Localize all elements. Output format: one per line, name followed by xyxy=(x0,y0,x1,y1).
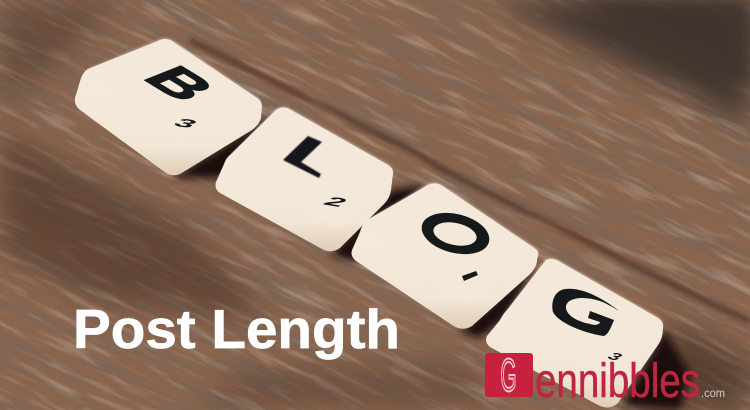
logo G badge xyxy=(485,349,533,401)
number 2: 2 xyxy=(319,194,353,210)
dark core upper right xyxy=(570,0,750,85)
letter L xyxy=(283,136,322,178)
tile: L xyxy=(216,108,393,251)
letter O xyxy=(417,206,494,261)
number 1 xyxy=(462,271,478,281)
dark area left xyxy=(0,130,270,320)
logo: Gennibbles.com xyxy=(485,349,725,408)
logo .com: .com xyxy=(701,386,725,400)
dark area bottom centre xyxy=(200,360,480,410)
title: Post Length xyxy=(73,298,400,360)
letter G xyxy=(552,289,619,336)
tile: O xyxy=(352,183,538,329)
logo G badge: G xyxy=(500,349,516,401)
plank groove xyxy=(190,40,750,322)
dark area upper right xyxy=(490,0,750,125)
number 3: 3 xyxy=(603,350,627,363)
letter B: B xyxy=(129,59,229,108)
dark area upper left xyxy=(0,0,125,110)
tile: G xyxy=(486,259,663,407)
tile shadows xyxy=(172,112,690,410)
dark area right xyxy=(640,320,750,410)
number 3: 3 xyxy=(169,116,203,131)
tile: B xyxy=(75,39,262,175)
logo wordmark: ennibbles xyxy=(535,355,700,408)
